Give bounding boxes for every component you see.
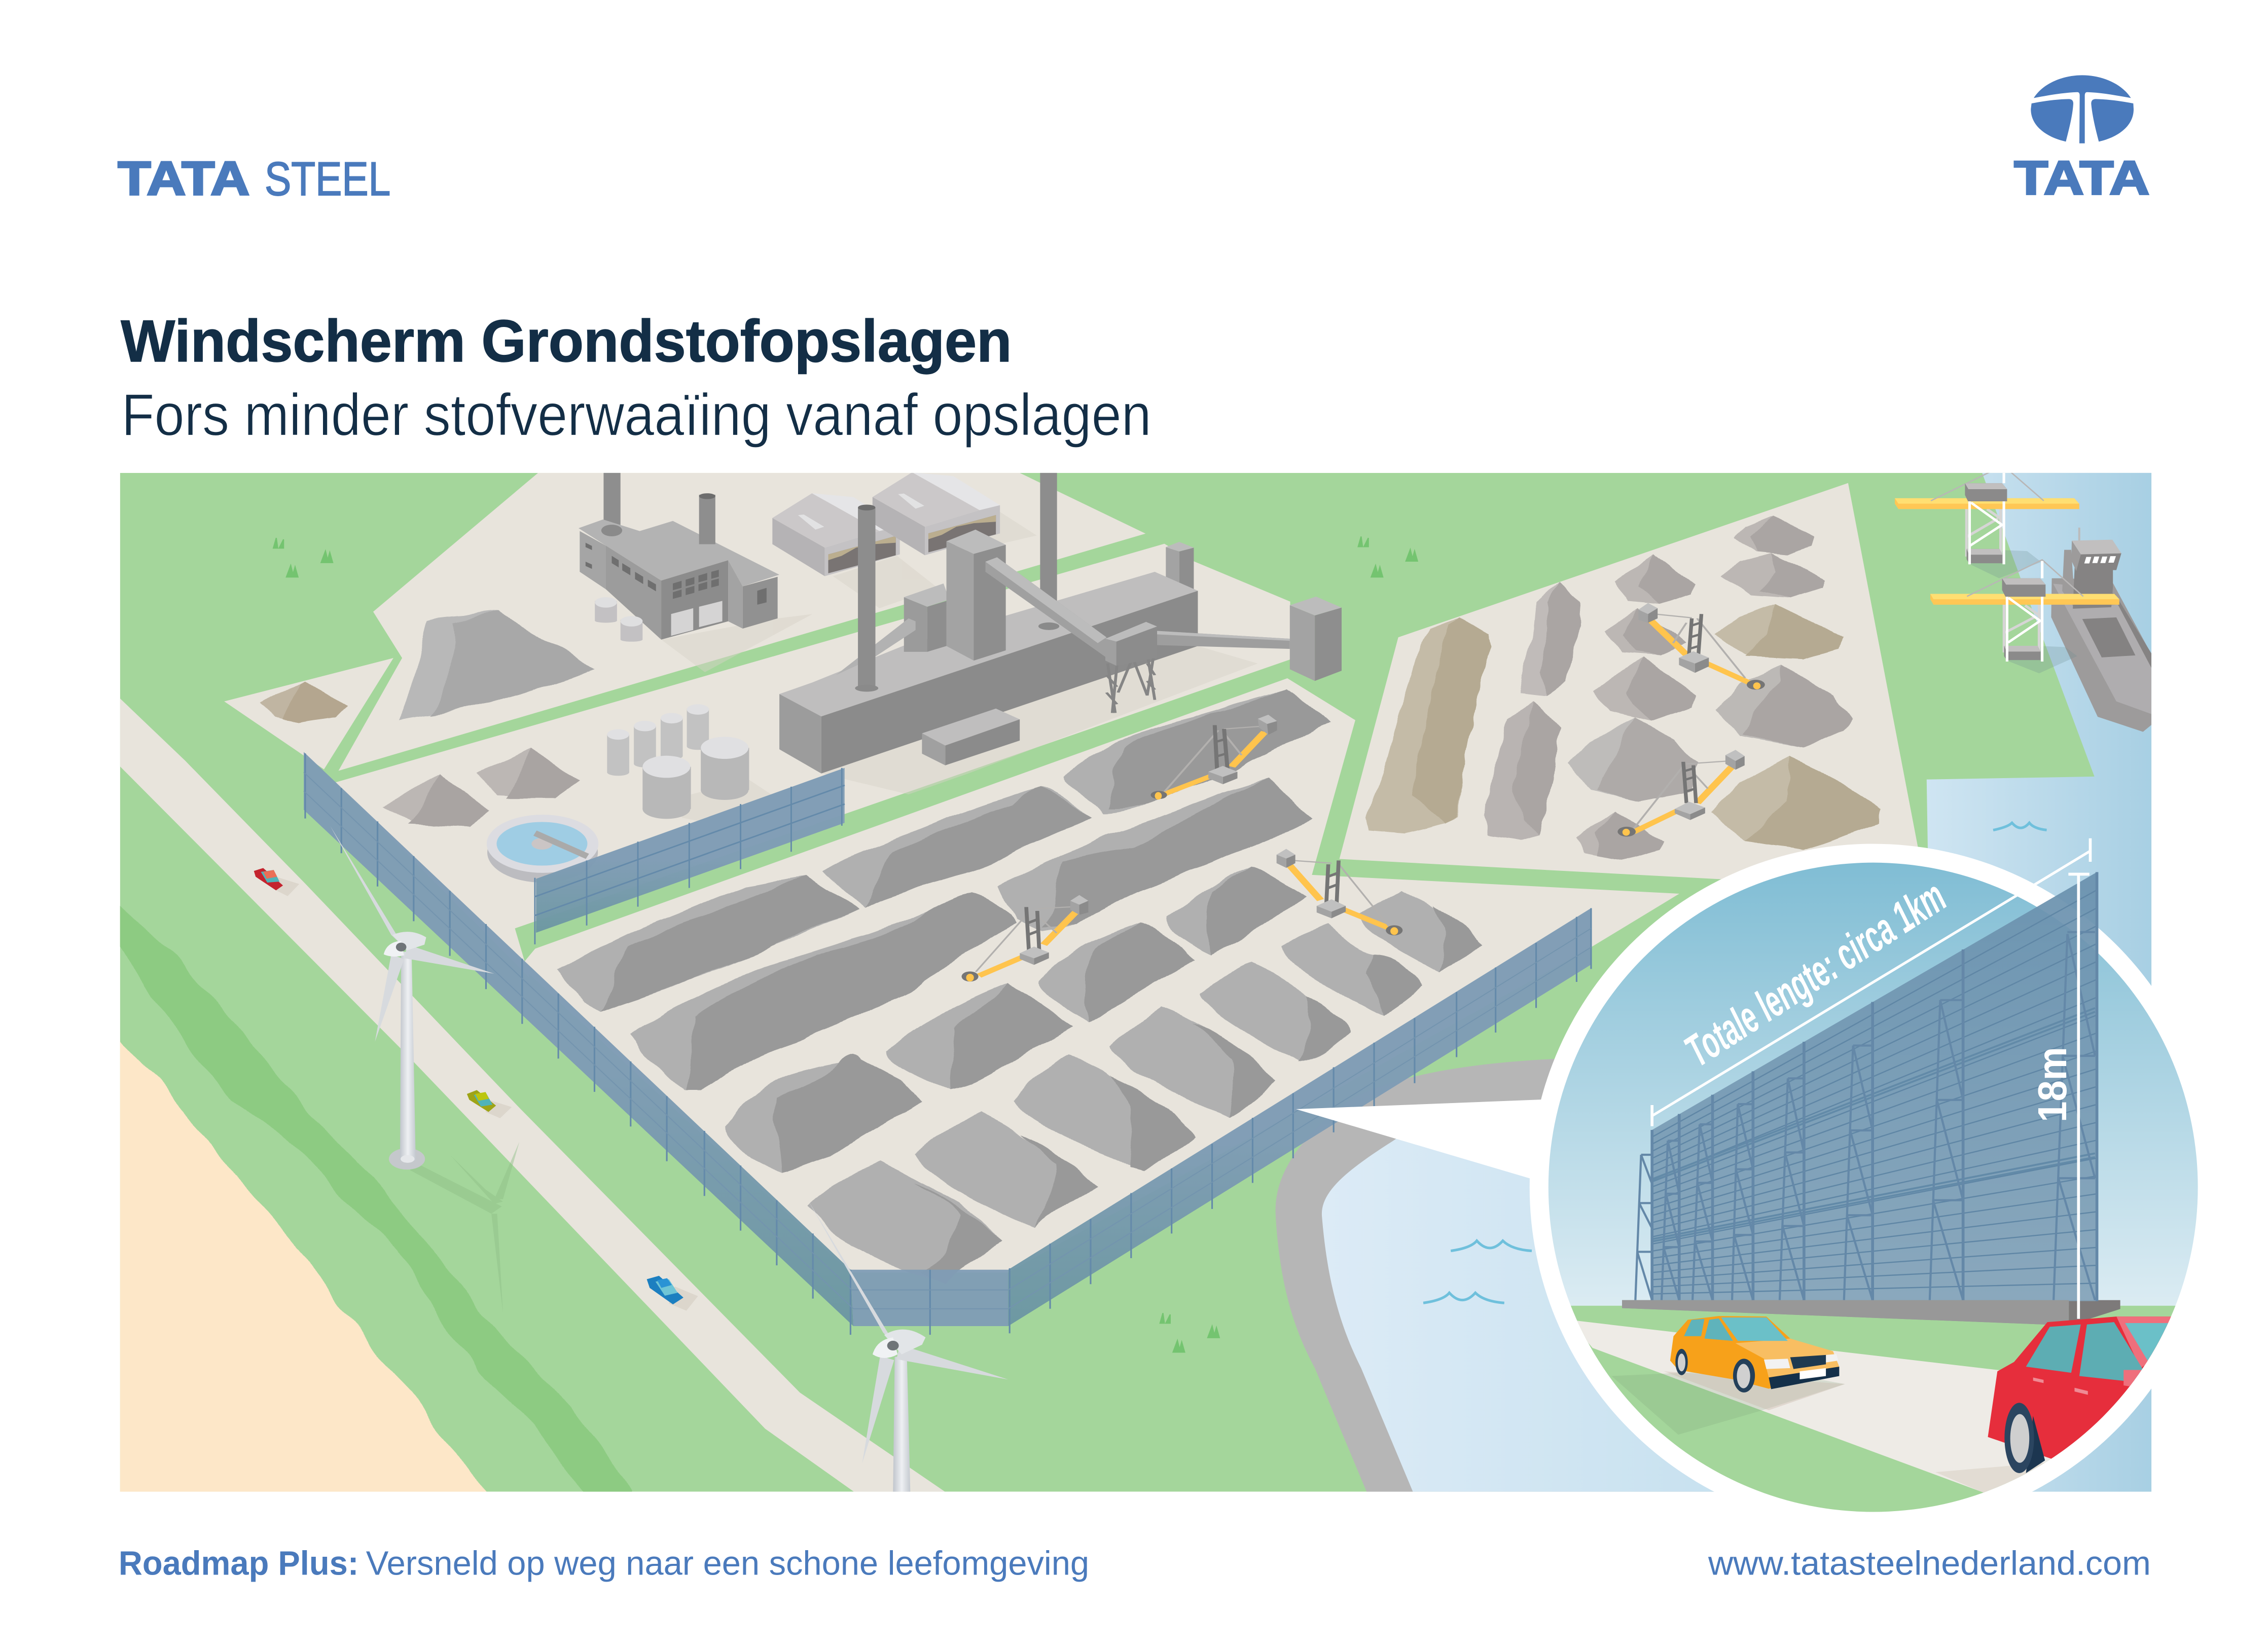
factory shadows — [661, 509, 1258, 829]
gantry 1 — [1895, 471, 2079, 564]
logo: Tata Steel wordmark: TATA — [118, 152, 249, 205]
beach sand — [120, 1042, 487, 1492]
foundation front strip — [1622, 1300, 2069, 1326]
footer: website: www.tatasteelnederland.com — [1708, 1545, 2151, 1583]
stockpiles: right stockyard — [1366, 516, 1881, 860]
subtitle: Fors minder stofverwaaïing vanaf opslagen — [122, 382, 1151, 448]
lot: top factory yard — [339, 473, 1145, 771]
lot: small triangle yard — [224, 658, 393, 770]
gantry 2 — [1930, 560, 2119, 662]
label: total length: Totale lengte: circa 1km — [1676, 871, 1955, 1076]
label: height: 18m — [2030, 1047, 2075, 1122]
lake with gray shore — [1276, 1058, 1808, 1492]
lot: main stockyard — [521, 678, 1679, 1272]
ground and road — [1521, 1306, 2264, 1550]
sea water top right — [1927, 471, 2155, 1497]
wind turbine 2 — [807, 1199, 1008, 1497]
stockpiles: small piles left — [260, 612, 596, 827]
coastal road — [120, 699, 946, 1492]
logo: Tata emblem and wordmark — [2014, 75, 2149, 204]
logo: Tata Steel wordmark — [118, 152, 390, 205]
car: red — [1988, 1316, 2188, 1473]
storage tanks — [607, 704, 749, 819]
panel: wind screen close-up — [1521, 862, 2264, 1550]
shadows — [1969, 550, 2041, 578]
footer: tagline: Roadmap Plus: — [119, 1545, 358, 1583]
dimension: height — [2068, 873, 2090, 1319]
concrete foundation — [1622, 1300, 2120, 1326]
wind turbine 1 — [330, 826, 494, 1169]
grass tufts — [273, 536, 1418, 1352]
inner wind screen — [535, 768, 845, 944]
car: blue — [647, 1276, 698, 1311]
car: red — [254, 868, 299, 896]
ship — [2051, 528, 2151, 732]
zoom circle ring — [1530, 844, 2217, 1531]
close-up cars and road foreground — [1622, 1300, 2188, 1473]
lot: right stockyard — [1340, 483, 1918, 879]
building: factory hall — [579, 471, 779, 642]
stockpiles: main stockyard — [557, 779, 1484, 1284]
gantry cranes and ship in harbour — [1895, 471, 2151, 732]
dune vegetation band — [120, 906, 632, 1492]
building: sinter plant with chimneys and conveyors — [779, 471, 1342, 774]
reclaimer machines: main stockyard — [961, 849, 1402, 981]
car: yellow — [1664, 1316, 1845, 1410]
title: Windscherm Grondstofopslagen — [121, 308, 1012, 374]
reclaimer machines: right stockyard — [1617, 603, 1765, 836]
water ripples — [1423, 823, 2047, 1303]
sky — [1547, 862, 2199, 1310]
dimension: total length — [1652, 838, 2090, 1126]
main wind screen along stockyard — [304, 752, 1591, 1335]
stockpile: back row near plant — [1064, 689, 1331, 813]
car: olive — [467, 1090, 512, 1118]
logo: Tata Steel wordmark: STEEL — [265, 152, 390, 205]
footer: tagline: Versneld op weg naar een schone leefomgeving — [366, 1545, 1089, 1583]
callout wedge — [1296, 1099, 1555, 1186]
turbine shadow — [410, 1142, 519, 1313]
building: storage sheds — [772, 472, 1000, 576]
water treatment basin — [487, 815, 598, 883]
wind screen close-up wall — [1635, 872, 2097, 1301]
lot: mid plant yard — [336, 544, 1290, 977]
logo: Tata emblem and wordmark: TATA — [2014, 151, 2149, 204]
panel: isometric site map — [87, 471, 2155, 1533]
